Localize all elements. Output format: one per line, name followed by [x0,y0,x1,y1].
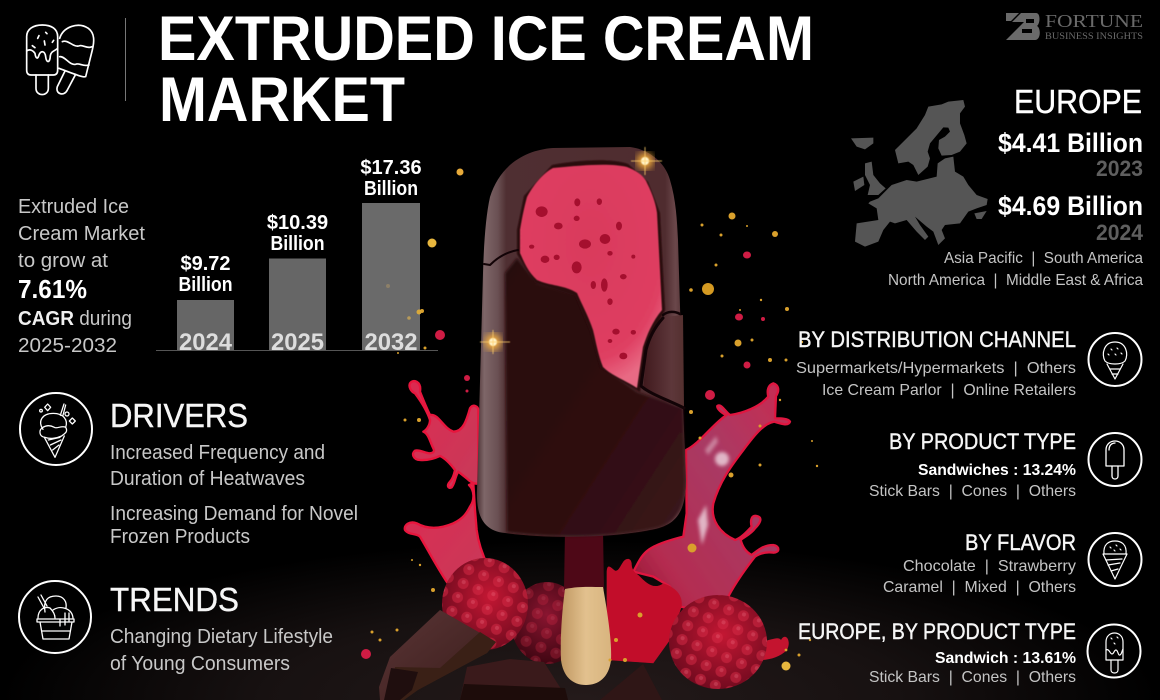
panel: by product type: BY PRODUCT TYPE [889,429,1076,454]
panel: by flavor: BY FLAVOR [965,530,1076,555]
CAGR text block: Cream Market [18,223,145,245]
icon: popsicles [27,25,94,95]
CAGR text block: CAGR during [18,308,132,330]
other regions: Asia Pacific | South America [944,250,1143,267]
logo: Fortune Business Insights: BUSINESS INSIGHTS [1045,32,1143,42]
title: EXTRUDED ICE CREAM [158,4,814,74]
gold specks [370,168,818,670]
panel: Europe [851,83,1144,289]
bar 2024: Billion [178,274,232,296]
dark chocolate face [505,258,685,536]
CAGR text block [18,196,145,357]
heading: DRIVERS [110,397,248,434]
icon: ice cream cup [19,581,91,653]
value 2024 [998,191,1144,245]
red splash right [607,383,790,663]
panel: by product type [869,429,1142,500]
title: MARKET [159,65,405,135]
chocolate bar [477,147,686,537]
trend text: of Young Consumers [110,653,290,675]
CAGR text block: Extruded Ice [18,196,129,218]
driver text: Increased Frequency and [110,442,325,464]
value 2023 [998,128,1143,181]
stick [561,530,611,685]
raspberry left [442,558,528,650]
panel: drivers [20,393,358,548]
panel: by distribution channel: Ice Cream Parlor | Online Retailers [822,382,1076,399]
CAGR text block: to grow at [18,250,108,272]
red blob at base [607,559,682,663]
sparkle [480,330,510,354]
trend text [110,626,333,675]
bar 2032: Billion [364,178,418,200]
chocolate pieces [379,610,662,700]
bar 2025: $10.39 [267,212,328,234]
bar 2024: $9.72 [180,253,231,275]
heading: EUROPE [1014,83,1142,120]
driver text [110,442,358,548]
bar 2025: Billion [270,233,324,255]
panel: by distribution channel [796,327,1142,399]
strawberry filling [517,160,665,392]
bar 2032 [360,157,422,356]
heading: TRENDS [110,581,239,618]
panel: Europe by product type: Sandwich : 13.61% [935,650,1076,667]
value 2023: 2023 [1096,156,1143,181]
juice highlights [698,436,729,545]
bar chart [156,157,438,356]
panel: by flavor [883,530,1142,596]
red droplets [361,252,765,659]
bar 2025: 2025 [271,329,324,356]
sparkle [631,147,662,175]
raspberry right [669,595,789,689]
panel: by product type: Sandwiches : 13.24% [918,462,1076,479]
other regions: North America | Middle East & Africa [888,272,1143,289]
raspberry back [511,582,583,664]
driver text: Frozen Products [110,526,250,548]
panel: trends [19,581,333,675]
title [158,4,814,135]
bar 2024: 2024 [179,329,233,356]
broken shell fragment [643,315,684,407]
trend text: Changing Dietary Lifestyle [110,626,333,648]
divider [124,18,126,101]
driver text: Increasing Demand for Novel [110,503,358,525]
value 2024: $4.69 Billion [998,191,1143,221]
other regions [888,250,1143,289]
map: Europe [851,100,988,247]
panel: Europe by product type [798,619,1140,686]
icon: ice cream cone [20,393,92,465]
panel: by distribution channel: BY DISTRIBUTION CHANNEL [798,327,1076,352]
CAGR text block: 7.61% [18,274,87,304]
driver text: Duration of Heatwaves [110,468,305,490]
icon: waffle cone [1088,533,1142,586]
logo: Fortune Business Insights: FORTUNE [1045,11,1143,31]
panel: by flavor: Caramel | Mixed | Others [883,579,1076,596]
value 2024: 2024 [1096,220,1144,245]
cracks [484,250,518,265]
value 2023: $4.41 Billion [998,128,1143,158]
icon: dipped bar [1088,624,1140,678]
bar 2032: 2032 [364,329,418,356]
bar 2024 [177,253,234,356]
panel: by flavor: Chocolate | Strawberry [903,558,1076,575]
panel: Europe by product type: EUROPE, BY PRODUCT TYPE [798,619,1076,644]
icon: stick bar [1088,433,1142,486]
bar 2032: $17.36 [360,157,422,179]
axis [156,350,438,352]
red splash left [405,381,488,587]
bar 2025 [267,212,328,356]
panel: by product type: Stick Bars | Cones | Others [869,483,1076,500]
logo: Fortune Business Insights [1006,11,1143,42]
CAGR text block: 2025-2032 [18,335,117,357]
pores [529,198,636,359]
panel: by distribution channel: Supermarkets/Hypermarkets | Others [796,360,1076,377]
icon: scoop cone [1088,333,1142,386]
panel: Europe by product type: Stick Bars | Cones | Others [869,669,1076,686]
